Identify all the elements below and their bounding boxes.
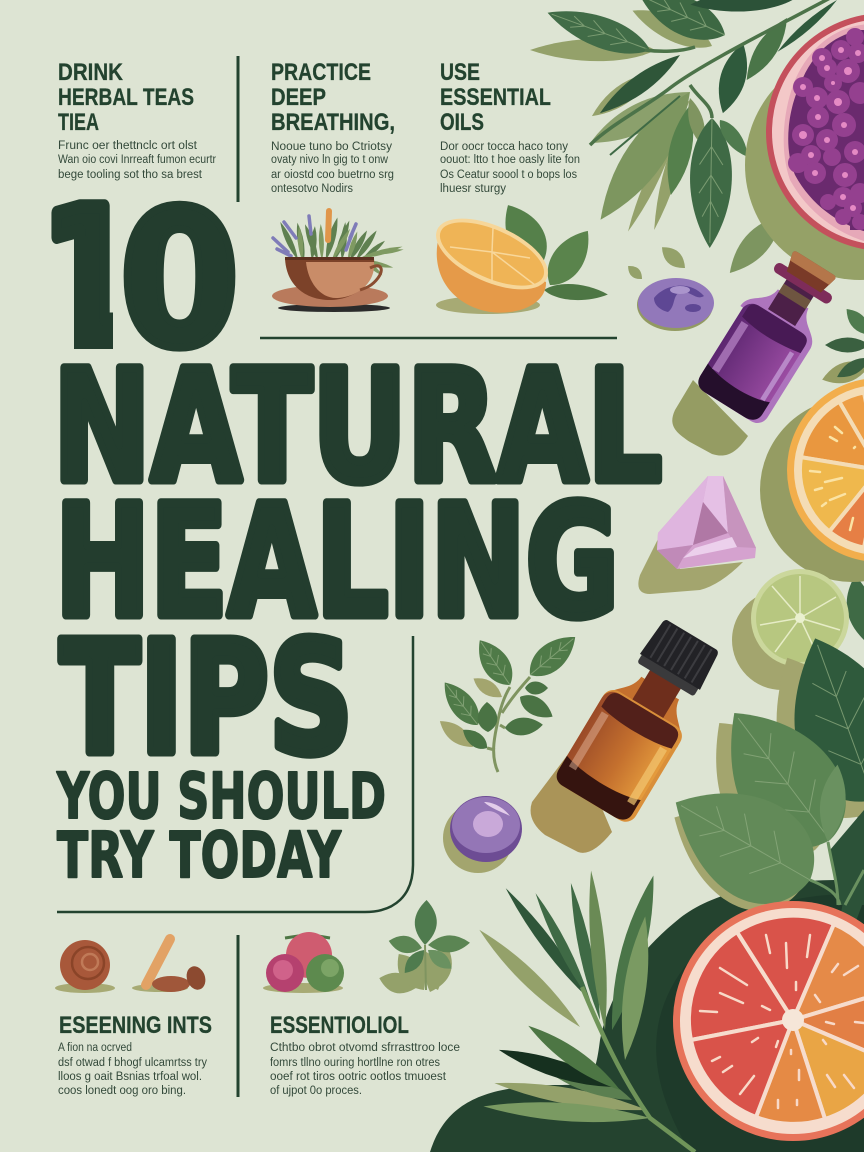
text block: bottom right body: fomrs tllno ouring hortllne ron otres (270, 1057, 440, 1069)
panel: bottom right tip (270, 1012, 460, 1097)
illustration: pink crystal (638, 476, 756, 594)
text block: drink herbal teas body (58, 140, 216, 181)
illustration: lime slice (732, 569, 849, 690)
text block: use essential oils body: Dor oocr tocca haco tony (440, 141, 568, 153)
text block: use essential oils body: Os Ceatur soool t o bops los (440, 169, 577, 181)
text block: practice deep breathing body: ar oiostd coo buetrno srg (271, 169, 394, 181)
subtitle line one: YOU SHOULD (56, 760, 386, 833)
text block: practice deep breathing body: Nooue tuno bo Ctriotsy (271, 141, 392, 153)
text block: use essential oils body (440, 141, 580, 195)
heading: drink herbal teas: DRINK (58, 59, 123, 86)
heading: use essential oils: OILS (440, 109, 484, 136)
illustration: right small leaves (819, 304, 864, 642)
heading: practice deep breathing: PRACTICE (271, 59, 371, 86)
icon: small plant (377, 900, 470, 998)
illustration: grapefruit (673, 901, 864, 1141)
icon: purple stone (637, 278, 714, 331)
illustration: large lower right leaves (650, 621, 864, 1000)
icon: berries (263, 932, 344, 993)
icon: orange half with leaves (426, 196, 608, 314)
text block: bottom right body (270, 1042, 460, 1097)
text block: drink herbal teas body: bege tooling sot tho sa brest (58, 169, 203, 181)
heading: drink herbal teas: TIEA (58, 109, 99, 136)
panel: tip practice deep breathing (271, 59, 395, 195)
text block: bottom left body: lloos g oait Bsnias trfoal wol. (58, 1071, 202, 1083)
title (41, 169, 662, 892)
background: lower right dark blob (430, 880, 864, 1152)
title number 1: 1 (41, 169, 137, 389)
illustration: pomegranate (745, 13, 864, 280)
title word natural: NATURAL (53, 338, 662, 517)
text block: bottom right body: ooef rot tiros ootric ootlos tmuoest (270, 1071, 447, 1083)
icon: purple sphere (443, 796, 522, 873)
text block: practice deep breathing body: ovaty nivo ln gig to t onw (271, 154, 389, 166)
text block: bottom left body: A fion na ocrved (58, 1042, 132, 1054)
text block: drink herbal teas body: Wan oio covi Inrreaft fumon ecurtr (58, 154, 216, 166)
illustration: amber bottle (531, 612, 731, 853)
illustration: rosemary sprig (474, 870, 695, 1152)
illustration: purple bottle (672, 242, 850, 456)
heading: practice deep breathing: DEEP (271, 84, 326, 111)
subtitle line two: TRY TODAY (57, 819, 342, 892)
icon: wooden spiral ball (55, 940, 115, 993)
text block: bottom left body: dsf otwad f bhogf ulcamrtss try (58, 1057, 207, 1069)
text block: practice deep breathing body: ontesotvo Nodirs (271, 183, 353, 195)
text block: bottom right body: of ujpot 0o proces. (270, 1085, 362, 1097)
panel: bottom left tip (58, 1012, 212, 1097)
illustration: orange slice (760, 378, 864, 582)
text block: bottom left body: coos lonedt oog oro bing. (58, 1085, 186, 1097)
panel: tip use essential oils (440, 59, 580, 195)
panel: tip drink herbal teas (58, 59, 216, 181)
heading: drink herbal teas (58, 59, 194, 136)
icon: cinnamon stick and nuts (132, 939, 209, 992)
heading: practice deep breathing: BREATHING, (271, 109, 395, 136)
title number 0: 0 (119, 170, 240, 390)
illustration: top right foliage (530, 0, 840, 283)
heading: eseening ints: ESEENING INTS (59, 1012, 212, 1039)
text block: bottom left body (58, 1042, 207, 1097)
heading: use essential oils: USE (440, 59, 480, 86)
heading: use essential oils (440, 59, 551, 136)
text block: drink herbal teas body: Frunc oer thettnclc ort olst (58, 140, 198, 152)
icon: herbal tea cup (272, 211, 404, 312)
text block: use essential oils body: oouot: ltto t hoe oasly lite fon (440, 154, 580, 166)
text block: use essential oils body: lhuesr sturgy (440, 183, 506, 195)
heading: use essential oils: ESSENTIAL (440, 84, 551, 111)
heading: drink herbal teas: HERBAL TEAS (58, 84, 194, 111)
title word healing: HEALING (55, 473, 619, 652)
icon: herb sprig (435, 627, 584, 772)
title word tips: TIPS (60, 608, 353, 789)
heading: essentioliol: ESSENTIOLIOL (270, 1012, 409, 1039)
text block: practice deep breathing body (271, 141, 394, 195)
text block: bottom right body: Cthtbo obrot otvomd sfrrasttroo loce (270, 1042, 460, 1054)
heading: practice deep breathing (271, 59, 395, 136)
